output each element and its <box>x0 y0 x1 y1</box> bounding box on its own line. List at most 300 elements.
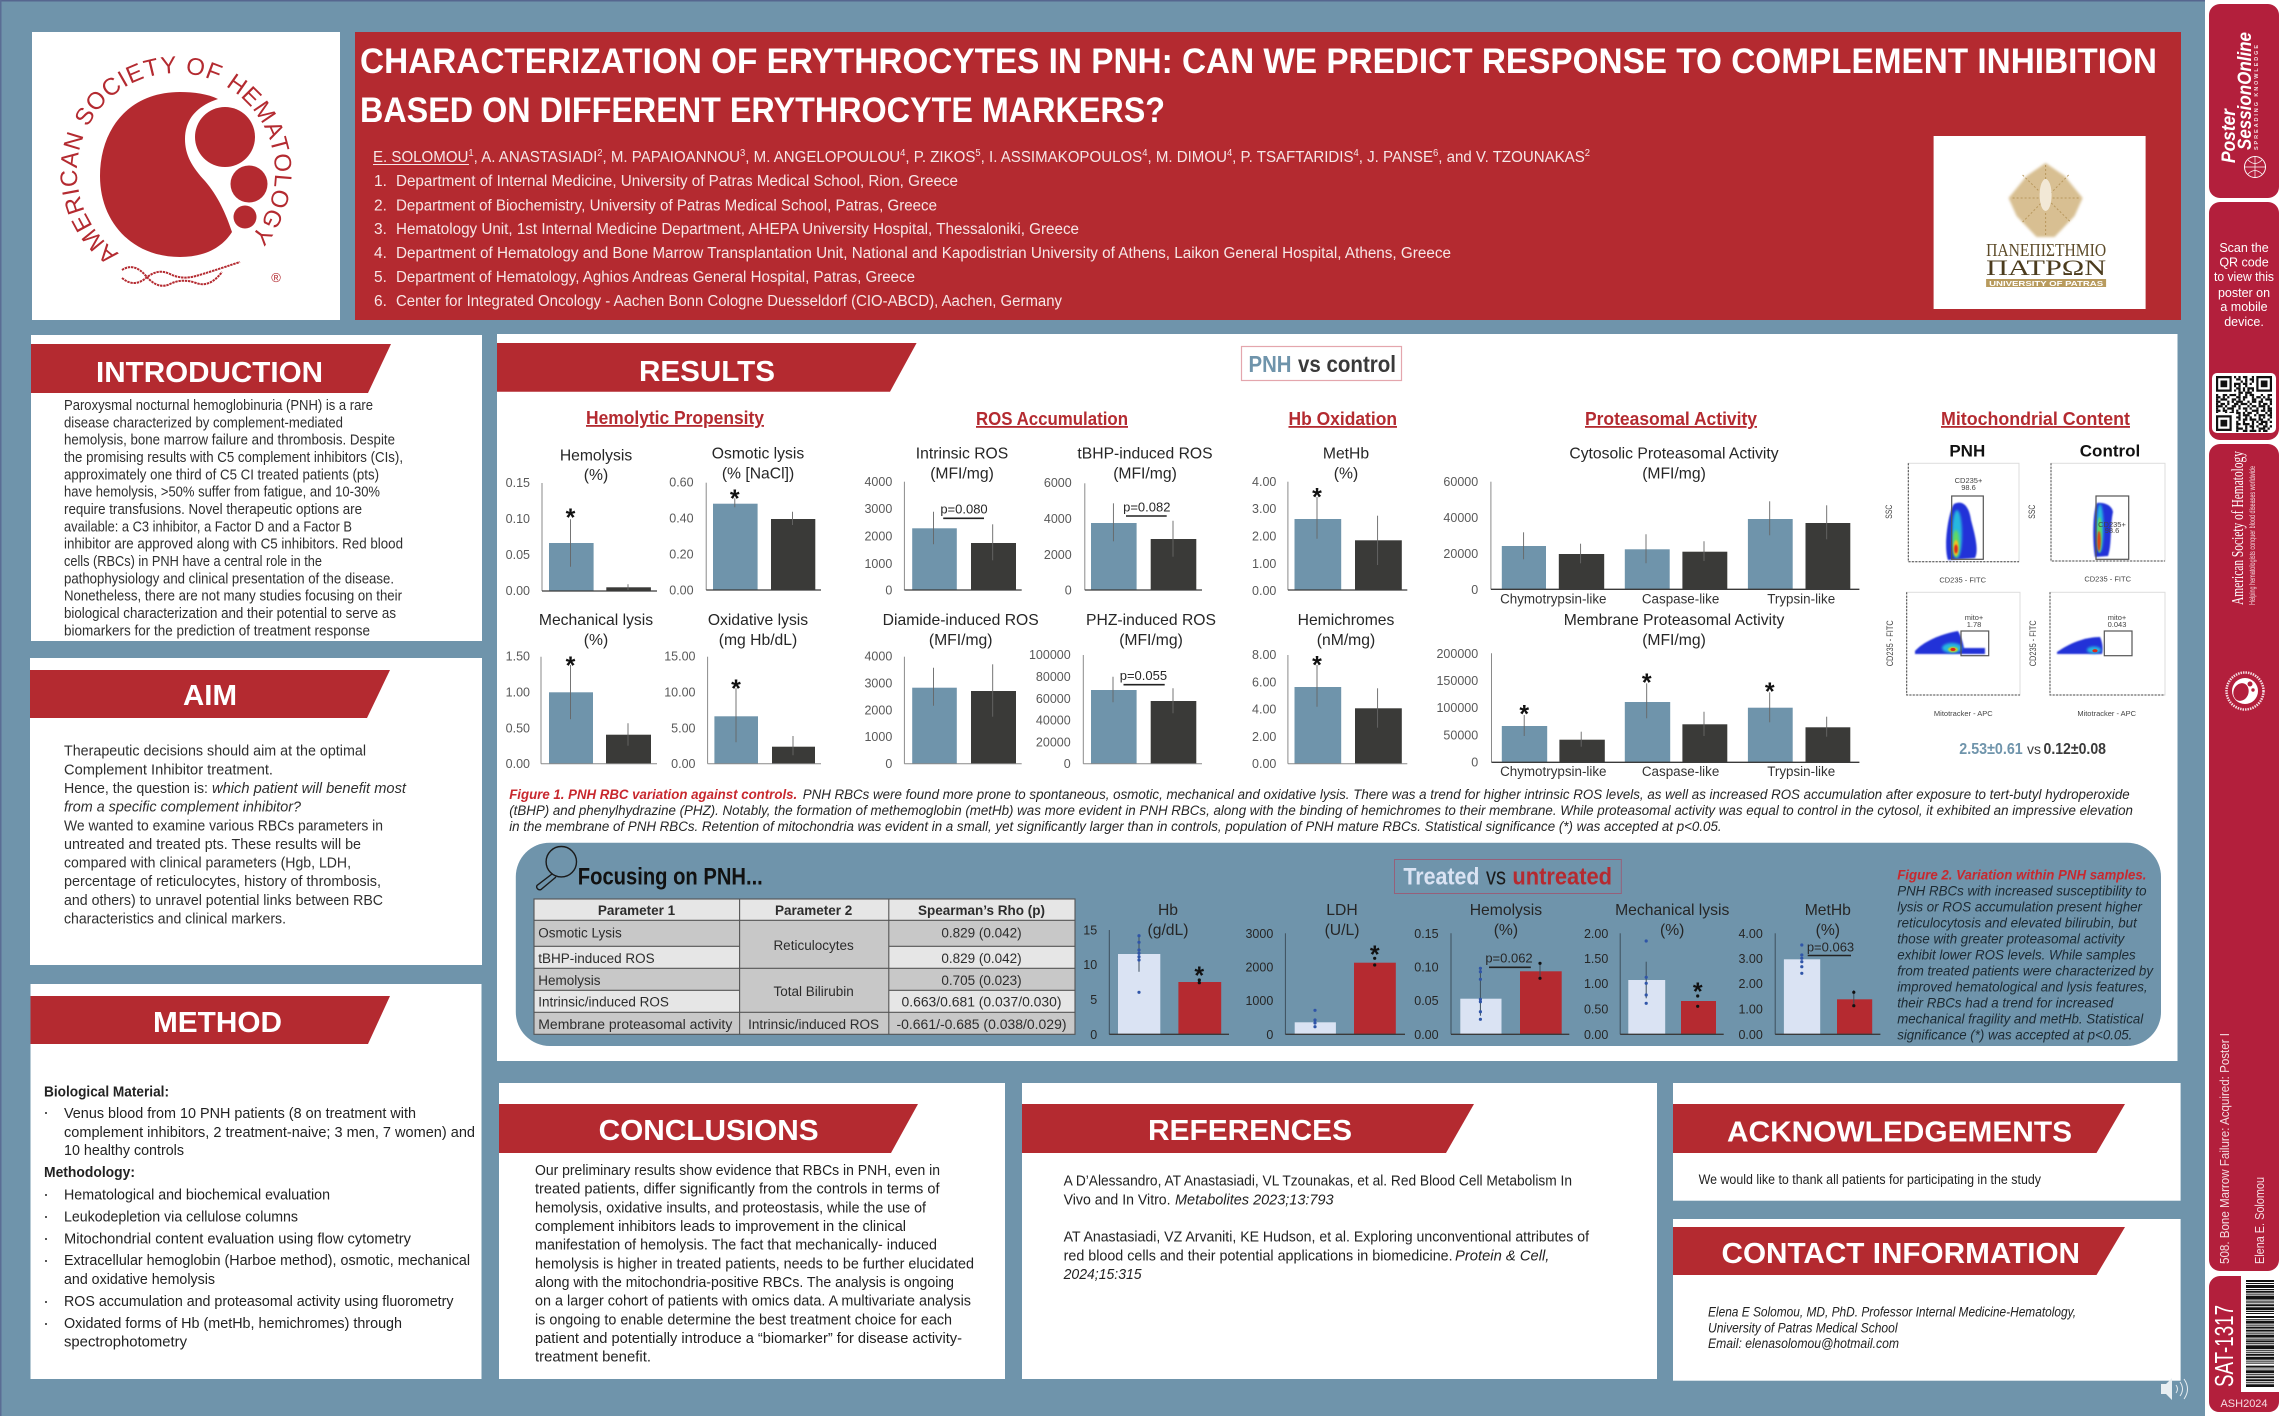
plot: PNH CD235 gate: CD235 - FITC <box>1939 575 1987 584</box>
plot: control mitotracker gate: CD235 - FITC <box>2028 620 2038 666</box>
panel: results <box>497 334 2178 1061</box>
text block: aim: Complement Inhibitor treatment. <box>64 762 273 778</box>
text block: method: and oxidative hemolysis <box>64 1272 215 1288</box>
table: Spearman correlations: Intrinsic/induced ROS <box>748 1017 879 1032</box>
bar chart: PHZ-induced ROS: PHZ-induced ROS <box>1086 612 1216 629</box>
text block: references: red blood cells and their potential applications in biomedicine. <box>1064 1248 1453 1264</box>
sidebar: American Society of Hematology details: Helping hematologists conquer blood diseases worldwide <box>2247 466 2257 605</box>
heading: conclusions <box>499 1104 918 1153</box>
bar chart: PHZ-induced ROS: 20000 <box>1036 736 1071 750</box>
legend: PNH vs control: vs control <box>1298 351 1396 377</box>
bar chart: Mechanical lysis treated vs untreated: 1.50 <box>1584 952 1608 966</box>
plot: control mitotracker gate: 0.043 <box>2108 620 2126 629</box>
bar chart: Diamide-induced ROS: 1000 <box>864 730 892 744</box>
bar chart: Membrane Proteasomal Activity: 50000 <box>1443 728 1478 742</box>
bar chart: Hemolysis: 0.10 <box>506 512 530 526</box>
plot: control CD235 gate: CD235 - FITC <box>2084 575 2132 584</box>
table: Spearman correlations: Osmotic Lysis <box>538 926 622 941</box>
legend: treated vs untreated <box>1394 860 1621 894</box>
text block: conclusions <box>535 1163 974 1366</box>
table: Spearman correlations: Parameter 2 <box>775 903 852 918</box>
caption: Figure 1: in the membrane of PNH RBCs. Retention of mitochondria was evident in a small, yet significantly larger than in controls, population of PNH mature RBCs. Statistical significance (*) was accepted at p<0.05. <box>509 819 1722 834</box>
plot: control CD235 gate: 98.6 <box>2105 526 2119 535</box>
QR code <box>2212 373 2276 433</box>
sidebar: American Society of Hematology details: American Society of Hematology <box>2228 451 2247 605</box>
bar chart: PHZ-induced ROS: 40000 <box>1036 714 1071 728</box>
text block: method: complement inhibitors, 2 treatment-naive; 3 men, 7 women) and <box>64 1125 475 1141</box>
bar chart: Hemolysis: Hemolysis <box>560 448 632 465</box>
heading: references: REFERENCES <box>1148 1115 1352 1147</box>
bar chart: Diamide-induced ROS: Diamide-induced ROS <box>883 612 1039 629</box>
text block: conclusions: treatment benefit. <box>535 1350 651 1366</box>
text block: conclusions: hemolysis is higher in treated patients, needs to be further elucidated <box>535 1256 974 1272</box>
bar chart: MetHb: * <box>1312 484 1322 512</box>
label: PNH: PNH <box>1949 442 1985 461</box>
bar chart: Mechanical lysis treated vs untreated: 0.50 <box>1584 1002 1608 1016</box>
bar chart: Mechanical lysis: 0.50 <box>506 722 530 736</box>
bar chart: PHZ-induced ROS: 60000 <box>1036 692 1071 706</box>
legend: treated vs untreated: untreated <box>1512 863 1612 890</box>
caption: Figure 1: Figure 1. PNH RBC variation against controls. <box>509 787 797 802</box>
bar chart: Hemichromes: Hemichromes <box>1298 612 1395 629</box>
table: Spearman correlations <box>534 899 1075 1034</box>
bar chart: Cytosolic Proteasomal Activity: Chymotrypsin-like <box>1500 591 1607 606</box>
bar chart: Osmotic lysis: 0.00 <box>669 584 694 598</box>
bar chart: tBHP-induced ROS: (MFI/mg) <box>1113 465 1177 482</box>
bar chart: Hemichromes: 2.00 <box>1252 730 1276 744</box>
text block: references: A D’Alessandro, AT Anastasiadi, VL Tzounakas, et al. Red Blood Cell Metabolism In <box>1064 1174 1572 1190</box>
text block: method: Extracellular hemoglobin (Harboe method), osmotic, mechanical <box>64 1253 470 1269</box>
legend: treated vs untreated: Treated <box>1403 863 1479 890</box>
table: Spearman correlations: Total Bilirubin <box>773 984 854 999</box>
authors: , P. TSAFTARIDIS <box>1232 149 1354 166</box>
bar chart: Oxidative lysis: * <box>731 675 741 703</box>
plot: PNH CD235 gate: SSC <box>1884 504 1894 519</box>
panel: method <box>30 984 482 1379</box>
plot: control CD235 gate: CD235+ <box>2098 520 2126 529</box>
panel: acknowledgements <box>1673 1083 2181 1201</box>
bar chart: tBHP-induced ROS: 4000 <box>1044 512 1072 526</box>
bar chart: MetHb treated vs untreated <box>1738 902 1880 1042</box>
bar chart: Diamide-induced ROS: 3000 <box>864 676 892 690</box>
authors: 1 <box>468 148 474 159</box>
bar chart: Cytosolic Proteasomal Activity: Cytosolic Proteasomal Activity <box>1569 445 1779 462</box>
bar chart: tBHP-induced ROS: 0 <box>1065 584 1072 598</box>
affiliations: Department of Internal Medicine, University of Patras Medical School, Rion, Greece <box>396 173 958 190</box>
authors: 2 <box>597 148 603 159</box>
stat: mitochondria-positive comparison: 2.53±0.61 <box>1959 741 2023 758</box>
text block: aim: which patient will benefit most <box>212 781 407 797</box>
authors: 2 <box>1585 148 1590 159</box>
heading: focusing on PNH: Focusing on PNH... <box>578 863 763 890</box>
plot: control CD235 gate: SSC <box>2027 504 2037 519</box>
bar chart: Mechanical lysis: 1.00 <box>506 686 530 700</box>
affiliations: 5. <box>374 269 387 286</box>
bar chart: MetHb: 2.00 <box>1252 530 1276 544</box>
bar chart: Osmotic lysis: * <box>730 485 740 513</box>
plot: PNH mitotracker gate <box>1885 592 2020 718</box>
bar chart: MetHb: 3.00 <box>1252 502 1276 516</box>
heading: method: METHOD <box>153 1007 282 1039</box>
table: Spearman correlations: tBHP-induced ROS <box>538 951 655 966</box>
authors: 4 <box>1354 148 1359 159</box>
bar chart: Membrane Proteasomal Activity: 100000 <box>1436 701 1478 715</box>
text block: conclusions: manifestation of hemolysis. The fact that mechanically- induced <box>535 1238 937 1254</box>
table: Spearman correlations: 0.663/0.681 (0.037/0.030) <box>902 995 1062 1010</box>
bar chart: tBHP-induced ROS: tBHP-induced ROS <box>1077 445 1213 462</box>
bar chart: MetHb: (%) <box>1334 465 1358 482</box>
text block: conclusions: complement inhibitors leads to improvement in the clinical <box>535 1219 906 1235</box>
sidebar: American Society of Hematology details: 508. Bone Marrow Failure: Acquired: Poster I <box>2217 1033 2232 1264</box>
text block: contact <box>1708 1305 2076 1351</box>
bar chart: Hemolysis: 0.15 <box>506 476 530 490</box>
bar chart: Oxidative lysis: 15.00 <box>664 650 696 664</box>
authors: , M. ANGELOPOULOU <box>745 149 900 166</box>
text block: contact: Elena E Solomou, MD, PhD. Professor Internal Medicine-Hematology, <box>1708 1305 2076 1320</box>
bar chart: Intrinsic ROS: Intrinsic ROS <box>916 445 1008 462</box>
sidebar: Poster Session Online badge <box>2209 4 2279 198</box>
text block: aim: We wanted to examine various RBCs parameters in <box>64 818 383 834</box>
caption: Figure 2: Figure 2. Variation within PNH samples. <box>1897 866 2146 882</box>
authors: 4 <box>1227 148 1233 159</box>
text block: introduction: inhibitor are approved along with C5 inhibitors. Red blood <box>64 537 403 553</box>
text block: method: Biological Material: <box>44 1085 169 1101</box>
bar chart: Oxidative lysis: Oxidative lysis <box>708 612 808 629</box>
bar chart: Cytosolic Proteasomal Activity: 0 <box>1471 583 1478 597</box>
text block: references: Metabolites 2023;13:793 <box>1175 1192 1334 1208</box>
ring lettering: AMERICAN SOCIETY OF HEMATOLOGY <box>60 56 292 262</box>
bar chart: Mechanical lysis treated vs untreated: 0.00 <box>1584 1028 1608 1042</box>
sidebar: Poster Session Online badge: Poster <box>2219 108 2240 163</box>
text block: introduction <box>64 398 403 639</box>
heading: contact information <box>1673 1227 2125 1275</box>
caption: Figure 2 <box>1897 866 2154 1042</box>
label: Control: Control <box>2080 442 2140 461</box>
heading: acknowledgements <box>1673 1104 2125 1153</box>
heading: results: RESULTS <box>639 356 775 388</box>
bar chart: LDH: 2000 <box>1245 960 1273 974</box>
sidebar: QR code prompt: Scan the <box>2219 241 2269 255</box>
logo: University of Patras <box>1934 136 2146 309</box>
text block: method: Venus blood from 10 PNH patients (8 on treatment with <box>64 1106 416 1122</box>
bar chart: Intrinsic ROS: 4000 <box>864 475 892 489</box>
bar chart: Intrinsic ROS: p=0.080 <box>940 501 988 516</box>
bar chart: MetHb treated vs untreated: 3.00 <box>1738 952 1763 966</box>
caption: Figure 2: mechanical fragility and metHb. Statistical <box>1897 1011 2144 1027</box>
plot: control mitotracker gate: Mitotracker - APC <box>2077 709 2137 718</box>
plot: PNH mitotracker gate: mito+ <box>1965 613 1984 622</box>
affiliations: 6. <box>374 293 387 310</box>
affiliations: Department of Hematology, Aghios Andreas General Hospital, Patras, Greece <box>396 269 915 286</box>
bar chart: PHZ-induced ROS: 100000 <box>1029 648 1071 662</box>
bar chart: Diamide-induced ROS: (MFI/mg) <box>929 632 993 649</box>
heading: method <box>30 996 390 1044</box>
bar chart: Oxidative lysis <box>664 612 821 771</box>
plot: PNH CD235 gate <box>1884 463 2019 584</box>
flow cytometry plots <box>1884 442 2165 758</box>
bar chart: Oxidative lysis: 10.00 <box>664 686 696 700</box>
table: Spearman correlations: Membrane proteasomal activity <box>538 1017 733 1032</box>
authors <box>373 148 1590 166</box>
text block: introduction: Nonetheless, there are not many studies focusing on their <box>64 589 402 605</box>
caption: Figure 2: PNH RBCs with increased susceptibility to <box>1897 883 2147 899</box>
bar chart: Mechanical lysis treated vs untreated: * <box>1693 978 1703 1006</box>
bar chart: Hemolysis treated vs untreated: 0.15 <box>1414 927 1439 941</box>
sidebar: abstract number and barcode <box>2209 1276 2279 1412</box>
bar chart: MetHb treated vs untreated: 0.00 <box>1738 1028 1763 1042</box>
bar chart: Membrane Proteasomal Activity: Membrane Proteasomal Activity <box>1564 612 1784 629</box>
bar chart: Hemichromes: 8.00 <box>1252 648 1276 662</box>
bar chart: LDH: LDH <box>1326 902 1358 919</box>
bar chart: Mechanical lysis treated vs untreated: Mechanical lysis <box>1615 902 1729 919</box>
authors: , M. PAPAIOANNOU <box>603 149 740 166</box>
text block: introduction: have hemolysis, >50% suffer from fatigue, and 10-30% <box>64 485 380 501</box>
affiliations <box>374 173 1451 310</box>
table: Spearman correlations: -0.661/-0.685 (0.038/0.029) <box>896 1017 1066 1032</box>
bar chart: Intrinsic ROS: 3000 <box>864 502 892 516</box>
bar chart: Hb: Hb <box>1158 902 1178 919</box>
affiliations: 1. <box>374 173 387 190</box>
bar chart: Hb: * <box>1194 962 1204 990</box>
text block: references: 2024;15:315 <box>1063 1267 1142 1283</box>
bar chart: MetHb treated vs untreated: 4.00 <box>1738 927 1763 941</box>
heading: acknowledgements: ACKNOWLEDGEMENTS <box>1727 1117 2072 1149</box>
text block: aim: untreated and treated pts. These results will be <box>64 837 361 853</box>
plot: PNH mitotracker gate: Mitotracker - APC <box>1934 709 1993 718</box>
bar chart: tBHP-induced ROS: 2000 <box>1044 548 1072 562</box>
bar chart: Hemolysis: 0.00 <box>506 584 530 598</box>
bar chart: LDH: 3000 <box>1245 927 1273 941</box>
table: Spearman correlations: Reticulocytes <box>773 938 854 953</box>
bar chart: Cytosolic Proteasomal Activity: 20000 <box>1443 547 1478 561</box>
bar chart: Hb: 10 <box>1083 958 1097 972</box>
affiliations: 2. <box>374 198 387 214</box>
bar chart: Cytosolic Proteasomal Activity: (MFI/mg) <box>1642 465 1706 482</box>
bar chart: MetHb: 1.00 <box>1252 557 1276 571</box>
section heading: Mitochondrial Content: Mitochondrial Content <box>1941 409 2130 429</box>
bar chart: Mechanical lysis treated vs untreated: 2.00 <box>1584 927 1608 941</box>
bar chart: Hb: 5 <box>1090 993 1097 1007</box>
plot: PNH CD235 gate: CD235+ <box>1955 476 1983 485</box>
heading: aim <box>30 670 390 718</box>
bar chart: Intrinsic ROS <box>864 445 1022 598</box>
text block: method: 10 healthy controls <box>64 1143 184 1159</box>
text block: introduction: hemolysis, bone marrow failure and thrombosis. Despite <box>64 433 395 449</box>
affiliations: Department of Biochemistry, University of Patras Medical School, Patras, Greece <box>396 198 937 214</box>
logo panel: American Society of Hematology: ® <box>271 270 281 285</box>
caption: Figure 1: PNH RBCs were found more prone to spontaneous, osmotic, mechanical and oxidative lysis. There was a trend for higher intrinsic ROS levels, as well as increased ROS accumulation after exposure to tert-butyl hydroperoxide <box>803 787 2130 802</box>
bar chart: PHZ-induced ROS: p=0.055 <box>1120 668 1167 683</box>
sidebar: Poster Session Online badge: SPREADING KNOWLEDGE <box>2254 45 2260 150</box>
bar chart: Osmotic lysis: 0.40 <box>669 512 694 526</box>
bar chart: Hemolysis: 0.05 <box>506 548 530 562</box>
authors: , I. ASSIMAKOPOULOS <box>981 149 1142 166</box>
logo: University of Patras: ΠΑΝΕΠΙΣΤΗΜΙΟ <box>1986 240 2106 260</box>
text block: aim: Hence, the question is: <box>64 781 208 797</box>
text block: introduction: available: a C3 inhibitor, a Factor D and a Factor B <box>64 519 352 535</box>
text block: conclusions: Our preliminary results show evidence that RBCs in PNH, even in <box>535 1163 940 1179</box>
authors: E. SOLOMOU <box>373 149 474 166</box>
caption: Figure 1 <box>509 787 2133 834</box>
logo: University of Patras: UNIVERSITY OF PATRAS <box>1989 281 2104 288</box>
stat: mitochondria-positive comparison: vs <box>2027 741 2041 757</box>
affiliations: 3. <box>374 221 387 238</box>
bar chart: Mechanical lysis treated vs untreated: (%) <box>1660 922 1684 939</box>
caption: Figure 2: improved hematological and lysis features, <box>1897 979 2148 995</box>
sidebar: American Society of Hematology details: Elena E. Solomou <box>2252 1177 2267 1264</box>
panel: focusing on PNH <box>516 843 2161 1046</box>
bar chart: LDH: (U/L) <box>1325 922 1359 939</box>
bar chart: Osmotic lysis: (% [NaCl]) <box>722 465 794 482</box>
table: Spearman correlations: Parameter 1 <box>598 903 676 918</box>
bar chart: Mechanical lysis: Mechanical lysis <box>539 612 653 629</box>
text block: aim: percentage of reticulocytes, history of thrombosis, <box>64 874 381 890</box>
authors: 5 <box>975 148 981 159</box>
bar chart: Hemolysis treated vs untreated: 0.00 <box>1414 1028 1439 1042</box>
plot: control mitotracker gate: mito+ <box>2108 613 2127 622</box>
bar chart: Membrane Proteasomal Activity: (MFI/mg) <box>1642 632 1706 649</box>
heading: introduction <box>31 344 391 393</box>
bar chart: Mechanical lysis: 1.50 <box>506 650 530 664</box>
sidebar: QR code prompt: a mobile <box>2220 300 2268 314</box>
bar chart: MetHb treated vs untreated: 1.00 <box>1738 1002 1763 1016</box>
text block: conclusions: treated patients, differ significantly from the controls in terms of <box>535 1182 940 1198</box>
section heading: Proteasomal Activity: Proteasomal Activity <box>1585 409 1757 429</box>
bar chart: PHZ-induced ROS: (MFI/mg) <box>1119 632 1183 649</box>
text block: conclusions: is ongoing to enable determine the best treatment choice for each <box>535 1312 952 1328</box>
title banner <box>355 32 2181 320</box>
affiliations: Center for Integrated Oncology - Aachen Bonn Cologne Duesseldorf (CIO-ABCD), Aachen, Germany <box>396 293 1062 310</box>
bar chart: Mechanical lysis: * <box>566 652 576 680</box>
text block: introduction: disease characterized by complement-mediated <box>64 415 343 431</box>
bar chart: Cytosolic Proteasomal Activity: 60000 <box>1443 475 1478 489</box>
title: CHARACTERIZATION OF ERYTHROCYTES IN PNH: CAN WE PREDICT RESPONSE TO COMPLEMENT INHIBITION <box>360 42 2157 81</box>
bar chart: MetHb treated vs untreated: p=0.063 <box>1807 940 1854 955</box>
text block: introduction: cells (RBCs) in PNH have a central role in the <box>64 554 322 570</box>
sidebar: QR code prompt: poster on <box>2218 286 2270 300</box>
bar chart: MetHb treated vs untreated: MetHb <box>1805 902 1851 919</box>
bar chart: Cytosolic Proteasomal Activity <box>1443 445 1859 606</box>
sidebar: QR code prompt: to view this <box>2214 270 2274 284</box>
stat: mitochondria-positive comparison <box>1959 741 2106 758</box>
heading: references <box>1022 1104 1474 1153</box>
sidebar: abstract number and barcode: SAT-1317 <box>2209 1305 2239 1387</box>
bar chart: Mechanical lysis: (%) <box>584 632 608 649</box>
bar chart: MetHb <box>1252 445 1407 598</box>
bar chart: Hb <box>1083 902 1229 1042</box>
bar chart: Hemolysis <box>506 448 657 598</box>
affiliations: 4. <box>374 245 387 262</box>
legend: treated vs untreated: vs <box>1486 863 1506 890</box>
bar chart: Cytosolic Proteasomal Activity: Trypsin-like <box>1767 591 1835 606</box>
bar chart: Membrane Proteasomal Activity: 150000 <box>1436 674 1478 688</box>
bar chart: LDH: 0 <box>1266 1028 1273 1042</box>
bar chart: Hemolysis: (%) <box>584 467 608 484</box>
authors: 3 <box>740 148 746 159</box>
text block: aim <box>64 744 407 928</box>
bar chart: PHZ-induced ROS: 0 <box>1064 757 1071 771</box>
caption: Figure 2: lysis or ROS accumulation present higher <box>1897 899 2143 915</box>
affiliations: Hematology Unit, 1st Internal Medicine Department, AHEPA University Hospital, Thessaloniki, Greece <box>396 221 1079 238</box>
bar chart: Hemolysis treated vs untreated: (%) <box>1494 922 1518 939</box>
bar chart: Oxidative lysis: 0.00 <box>671 757 696 771</box>
text block: conclusions: hemolysis, oxidative insults, and proteostasis, while the use of <box>535 1200 927 1216</box>
bar chart: Hemichromes <box>1252 612 1407 771</box>
authors: , and V. TZOUNAKAS <box>1438 149 1585 166</box>
panel: aim <box>30 658 482 965</box>
heading: aim: AIM <box>183 680 237 712</box>
table: Spearman correlations: Hemolysis <box>538 973 601 988</box>
table: Spearman correlations: 0.829 (0.042) <box>941 951 1022 966</box>
text block: conclusions: along with the mitochondria-positive RBCs. The analysis is ongoing <box>535 1275 954 1291</box>
plot: control mitotracker gate <box>2028 592 2165 718</box>
text block: aim: and others) to unravel potential links between RBC <box>64 893 383 909</box>
heading: introduction: INTRODUCTION <box>96 357 323 389</box>
plot: PNH mitotracker gate: 1.78 <box>1967 620 1981 629</box>
icon: red blood cell mark <box>100 92 268 257</box>
bar chart: Diamide-induced ROS: 4000 <box>864 650 892 664</box>
bar chart: LDH: 1000 <box>1245 994 1273 1008</box>
text block: references: Vivo and In Vitro. <box>1064 1192 1171 1208</box>
bar chart: Mechanical lysis: 0.00 <box>506 757 530 771</box>
icon: mini ASH logo <box>2226 672 2264 710</box>
title <box>360 42 2157 130</box>
authors: 4 <box>900 148 906 159</box>
bar chart: Cytosolic Proteasomal Activity: Caspase-like <box>1642 591 1719 606</box>
stat: mitochondria-positive comparison: 0.12±0.08 <box>2044 741 2106 758</box>
text block: introduction: Paroxysmal nocturnal hemoglobinuria (PNH) is a rare <box>64 398 373 414</box>
bar chart: Membrane Proteasomal Activity: Chymotrypsin-like <box>1500 764 1607 779</box>
bar chart: tBHP-induced ROS: 6000 <box>1044 476 1072 490</box>
bar chart: Membrane Proteasomal Activity: 200000 <box>1436 647 1478 661</box>
caption: Figure 2: their RBCs had a trend for increased <box>1897 994 2115 1010</box>
section heading: Hb Oxidation: Hb Oxidation <box>1288 409 1397 429</box>
text block: introduction: require transfusions. Novel therapeutic options are <box>64 502 362 518</box>
text block: conclusions: on a larger cohort of patients with omics data. A multivariate analysis <box>535 1294 971 1310</box>
text block: method: ROS accumulation and proteasomal activity using fluorometry <box>64 1294 454 1310</box>
bar chart: Oxidative lysis: 5.00 <box>671 722 696 736</box>
sidebar: American Society of Hematology details <box>2209 444 2279 1271</box>
sidebar: QR code prompt <box>2209 202 2279 440</box>
bar chart: Oxidative lysis: (mg Hb/dL) <box>719 632 797 649</box>
bar chart: Hemichromes: 0.00 <box>1252 757 1276 771</box>
text block: contact: Email: elenasolomou@hotmail.com <box>1708 1336 1899 1351</box>
bar chart: PHZ-induced ROS: 80000 <box>1036 670 1071 684</box>
heading: contact information: CONTACT INFORMATION <box>1722 1238 2080 1270</box>
bar chart: Diamide-induced ROS: 0 <box>885 757 892 771</box>
bar chart: Intrinsic ROS: (MFI/mg) <box>930 465 994 482</box>
text block: method: Leukodepletion via cellulose columns <box>64 1210 298 1226</box>
authors: , P. ZIKOS <box>905 149 975 166</box>
bar chart: Intrinsic ROS: 0 <box>885 584 892 598</box>
authors: , J. PANSE <box>1359 149 1433 166</box>
text block: method: Mitochondrial content evaluation using flow cytometry <box>64 1232 412 1248</box>
authors: 6 <box>1433 148 1439 159</box>
bar chart: LDH <box>1245 902 1405 1042</box>
bar chart: MetHb treated vs untreated: 2.00 <box>1738 977 1763 991</box>
bar chart: Hb: 0 <box>1090 1028 1097 1042</box>
text block: method <box>44 1085 475 1351</box>
bar chart: Membrane Proteasomal Activity: * <box>1519 700 1529 728</box>
title: BASED ON DIFFERENT ERYTHROCYTE MARKERS? <box>360 91 1165 130</box>
table: Spearman correlations: 0.829 (0.042) <box>941 926 1022 941</box>
text block: contact: University of Patras Medical School <box>1708 1321 1898 1336</box>
sidebar <box>2205 0 2283 1416</box>
bar chart: MetHb: 0.00 <box>1252 584 1276 598</box>
bar chart: MetHb treated vs untreated: (%) <box>1816 922 1840 939</box>
table: Spearman correlations: 0.705 (0.023) <box>941 973 1022 988</box>
heading: results <box>497 343 917 392</box>
